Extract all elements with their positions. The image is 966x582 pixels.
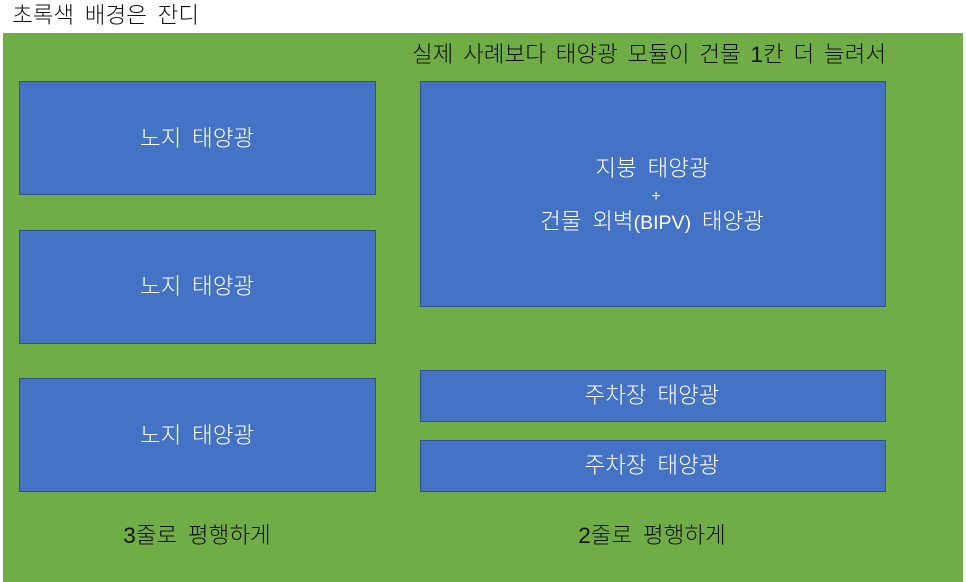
label: building facade BIPV solar: 건물 외벽(BIPV) 태양광 <box>540 209 764 234</box>
label: plus: + <box>651 188 661 205</box>
caption: green background is grass: 초록색 배경은 잔디 <box>12 3 199 28</box>
label: ground solar 3: 노지 태양광 <box>140 423 254 448</box>
panel: parking solar 2 <box>420 440 886 492</box>
note: three rows in parallel: 3줄로 평행하게 <box>123 523 271 548</box>
panel: parking solar 1 <box>420 370 886 422</box>
label: roof solar: 지붕 태양광 <box>595 156 710 181</box>
label: ground solar 1: 노지 태양광 <box>140 126 254 151</box>
label: parking solar 1: 주차장 태양광 <box>585 383 719 408</box>
panel: ground solar 3 <box>19 378 376 492</box>
label: ground solar 2: 노지 태양광 <box>140 274 254 299</box>
heading: module note: 실제 사례보다 태양광 모듈이 건물 1칸 더 늘려서 <box>412 42 886 67</box>
note: two rows in parallel: 2줄로 평행하게 <box>578 523 726 548</box>
panel: ground solar 2 <box>19 230 376 344</box>
panel: ground solar 1 <box>19 81 376 195</box>
label: parking solar 2: 주차장 태양광 <box>585 453 719 478</box>
panel: roof and BIPV solar <box>420 81 886 307</box>
